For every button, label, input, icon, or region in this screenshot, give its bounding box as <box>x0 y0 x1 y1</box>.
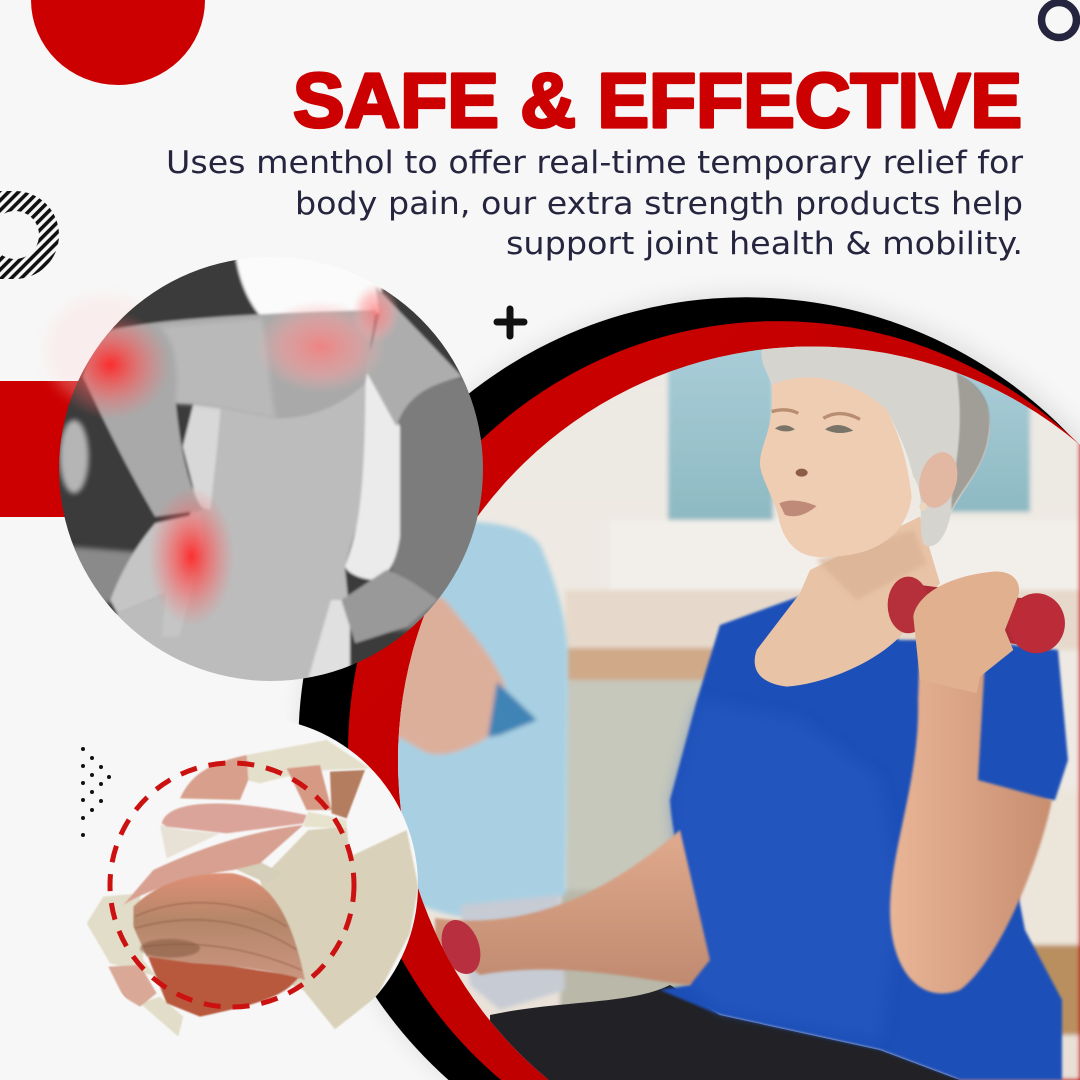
decorative navy ring <box>1042 2 1076 38</box>
photo: back and shoulder pain <box>50 250 493 690</box>
hand on right hip <box>341 570 438 643</box>
description text: support joint health & mobility. <box>506 226 1023 262</box>
arcs behind the photo <box>298 297 1080 1080</box>
bokeh highlights <box>60 420 89 493</box>
bright sky <box>234 257 384 316</box>
pain glow: shoulder <box>255 300 386 393</box>
muscle illustration circle <box>82 717 418 1053</box>
lower left light background <box>73 544 134 606</box>
right shoulder <box>365 287 462 427</box>
hair <box>761 343 990 546</box>
man in blue shirt <box>395 522 568 1010</box>
main photo: woman exercising <box>380 330 1080 1080</box>
face <box>760 377 912 557</box>
bone: mid strip <box>230 860 282 883</box>
eyes <box>775 425 853 433</box>
sweater torso <box>103 377 365 690</box>
description text: Uses menthol to offer real-time temporary relief for <box>166 145 1023 181</box>
mouth <box>779 501 817 516</box>
woman's left forearm <box>435 830 710 985</box>
black arc <box>298 297 1080 1080</box>
soft shadow of arcs <box>304 297 1080 1080</box>
white inner top <box>345 370 400 580</box>
red arc <box>348 321 1080 1080</box>
bone: behind muscles <box>160 825 220 858</box>
muscle: dark right <box>330 770 365 818</box>
hair shadow <box>952 373 990 510</box>
background <box>59 260 464 666</box>
hand on left hip <box>109 514 190 634</box>
photo background: room <box>380 330 1080 1080</box>
eyebrows <box>772 410 860 419</box>
arm shading <box>159 318 276 418</box>
tendon <box>303 812 347 828</box>
decorative red circle <box>31 0 205 85</box>
bone: scapula body <box>260 827 418 1029</box>
red rectangle accent <box>0 381 78 517</box>
muscle: lower strand <box>147 953 300 1017</box>
neck shadow <box>817 530 927 600</box>
deltoid striations <box>135 903 302 970</box>
woman's head and hand <box>755 343 1065 693</box>
right blurred foliage <box>390 377 493 630</box>
description text: body pain, our extra strength products help <box>295 186 1023 222</box>
description text <box>166 145 1023 262</box>
dashed red highlight circle <box>110 763 354 1007</box>
woman's blue shirt <box>660 595 1068 1080</box>
woman's trousers <box>490 985 960 1080</box>
bent arm <box>83 310 376 517</box>
nose shadow <box>796 469 808 477</box>
muscle: long strand 1 <box>162 804 307 833</box>
ear <box>919 452 958 508</box>
bone: lower left <box>140 997 183 1037</box>
hand <box>913 572 1019 693</box>
deltoid dark patch <box>140 939 200 958</box>
muscle: upper <box>180 755 248 800</box>
earring <box>919 503 927 511</box>
shoulder muscle illustration <box>87 740 418 1037</box>
dumbbell <box>923 585 1022 644</box>
bone: top band <box>247 740 370 783</box>
decorative striped ring <box>0 191 59 279</box>
pain glow: lower back <box>148 487 234 627</box>
dotted triangle decoration <box>81 747 111 837</box>
small red dumbbell <box>442 920 480 974</box>
lower white garment <box>307 600 350 683</box>
pain glow: elbow <box>70 314 166 417</box>
muscle: deltoid <box>133 873 305 980</box>
faint glow outside the circle <box>45 295 165 405</box>
muscle: small left <box>108 965 157 1007</box>
muscle: long strand 2 <box>123 825 303 905</box>
muscle: upper right <box>287 765 332 810</box>
shirt shading <box>664 698 769 1027</box>
title: SAFE & EFFECTIVE <box>293 58 1022 144</box>
chest and neck <box>755 517 940 687</box>
bone: left head <box>87 893 157 977</box>
woman's right arm <box>890 640 1052 993</box>
icon: plus <box>497 309 524 336</box>
pain glow: neck <box>352 283 400 343</box>
sweater left sliver <box>183 405 221 510</box>
